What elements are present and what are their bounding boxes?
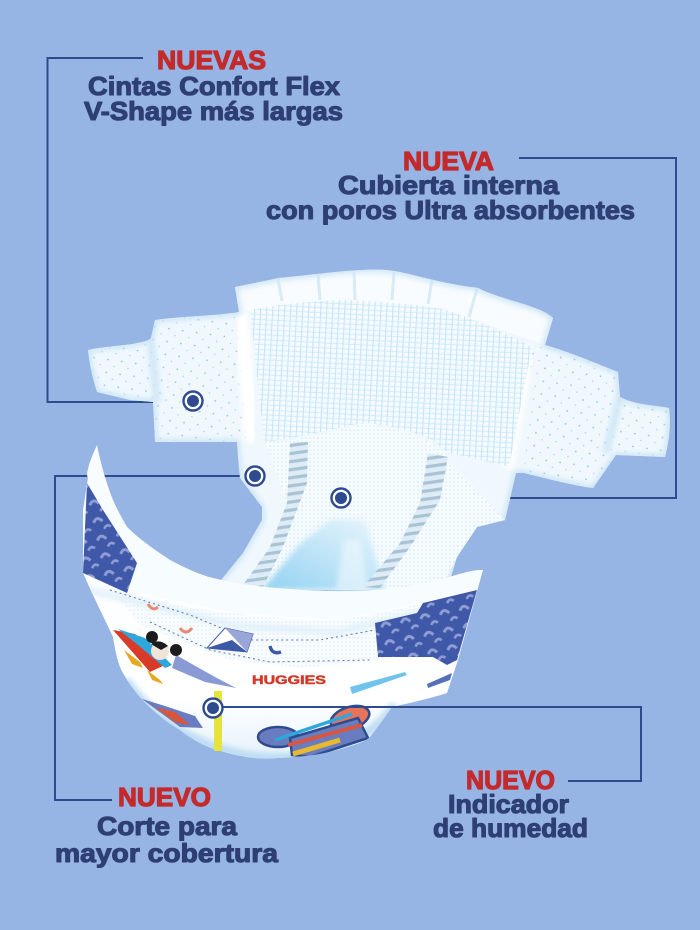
blue patch right (375, 590, 477, 665)
brand logo: HUGGIES (252, 675, 326, 687)
label: indicador: de humedad (433, 813, 588, 843)
marker: corte (246, 466, 264, 486)
diaper back with wings (80, 260, 680, 595)
small print lower left (142, 699, 203, 728)
small decorative marks (148, 604, 192, 632)
label: corte: mayor cobertura (55, 838, 279, 868)
kite graphic (207, 628, 253, 652)
connector line: indicador (213, 707, 641, 781)
Mickey print (258, 701, 372, 757)
blue patch left (83, 483, 137, 593)
dotted stitching (110, 590, 375, 662)
marker: cintas (184, 392, 202, 410)
marker: indicador (204, 698, 222, 718)
label: cintas: Cintas Confort Flex (88, 71, 341, 101)
label: cubierta: con poros Ultra absorbentes (266, 195, 635, 225)
absorbent mesh panel (250, 300, 532, 467)
small stripes right (427, 673, 452, 688)
label: cintas: V-Shape más largas (84, 96, 343, 126)
connector line: cubierta interna (350, 158, 676, 498)
label: cubierta: Cubierta interna (338, 170, 560, 200)
label: cintas: NUEVAS (157, 45, 266, 75)
Mickey in plane (113, 629, 236, 688)
diaper illustration (80, 260, 680, 765)
label: cintas (84, 45, 343, 126)
label: cubierta: NUEVA (403, 146, 494, 176)
wetness indicator (214, 691, 222, 751)
label: indicador: NUEVO (466, 765, 555, 795)
label: indicador (433, 765, 588, 843)
diaper front (80, 440, 490, 765)
label: corte: NUEVO (118, 782, 211, 812)
label: indicador: Indicador (448, 789, 569, 819)
marker: cubierta (332, 488, 350, 508)
inner liner with pores (243, 423, 505, 590)
label: corte (55, 782, 279, 868)
light blue strip (350, 672, 407, 694)
label: corte: Corte para (97, 811, 238, 841)
connector line: corte (55, 476, 244, 800)
label: cubierta (266, 146, 635, 225)
moon mark (270, 646, 281, 653)
connector line: cintas (48, 58, 183, 402)
